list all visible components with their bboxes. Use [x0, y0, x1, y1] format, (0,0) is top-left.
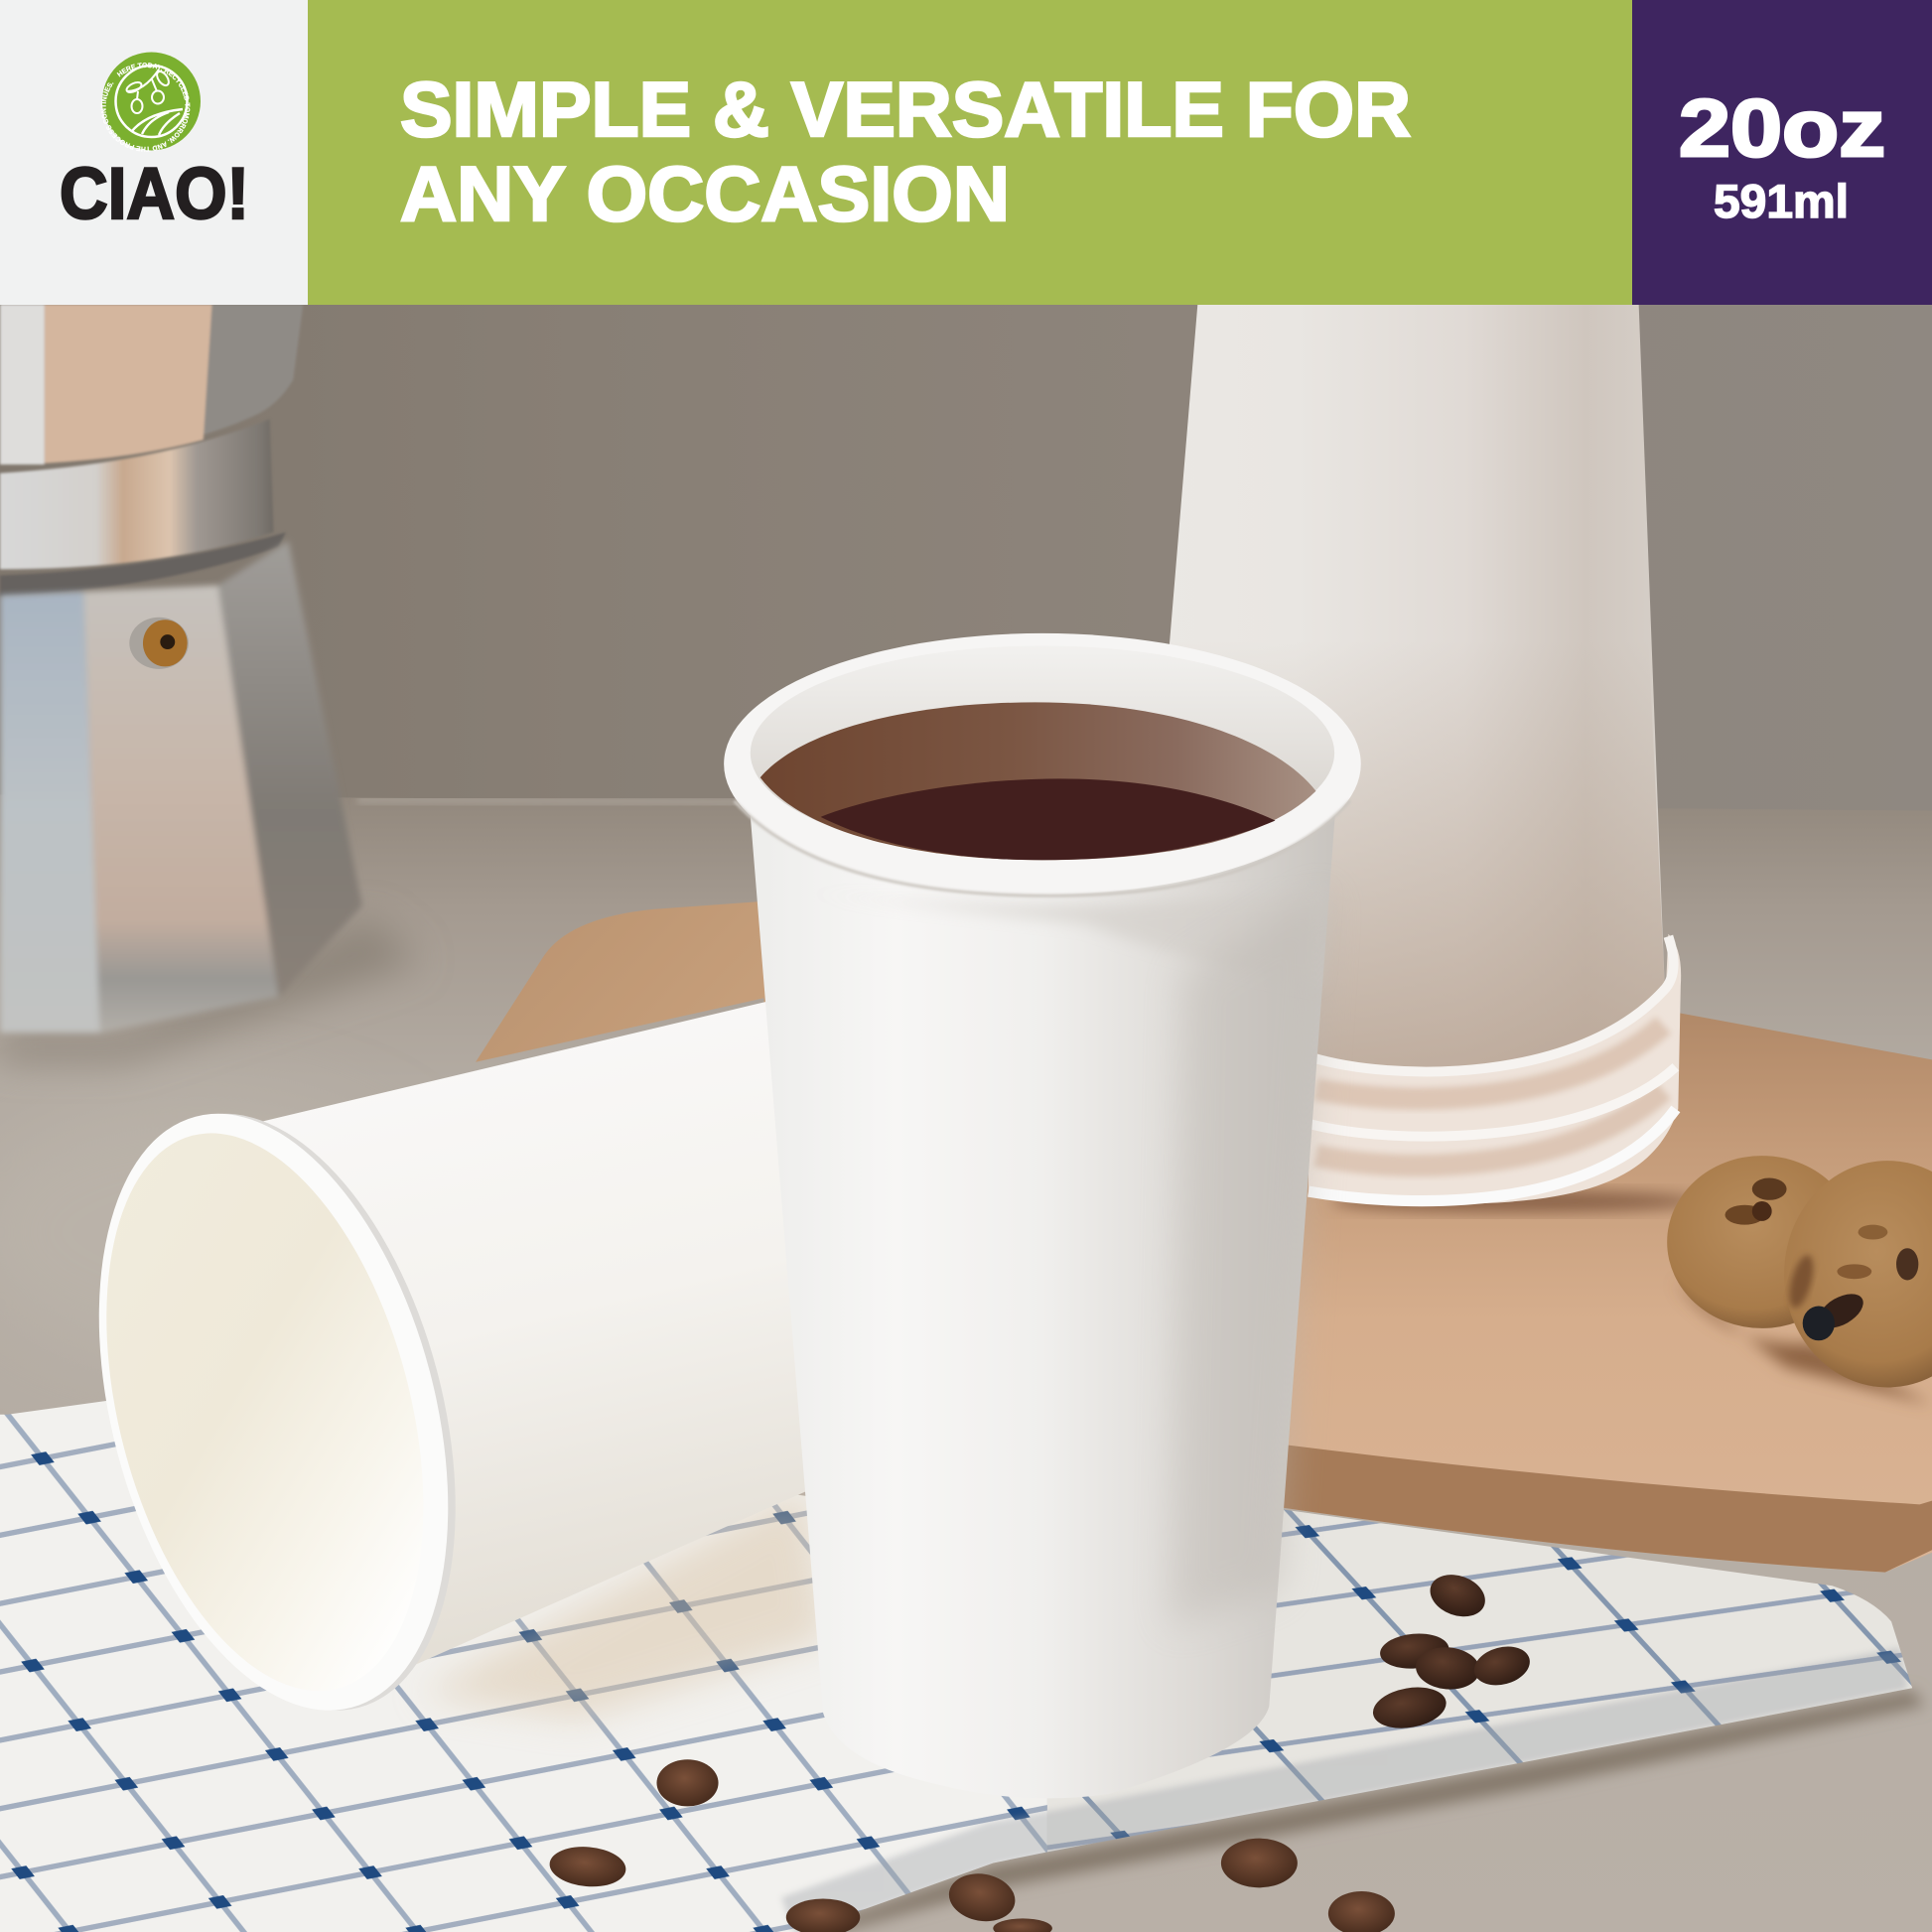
moka pot collar [0, 419, 274, 569]
stack rims [1309, 934, 1681, 1204]
title text [400, 66, 1411, 237]
stack body [1136, 305, 1665, 1071]
cloth left section [0, 1399, 1047, 1932]
lying cup rim shade [47, 1075, 515, 1748]
moka pot lower body [0, 541, 362, 1033]
moka pot safety valve [129, 618, 189, 669]
lying cup body [252, 1001, 807, 1666]
size in ounces: 20oz [1679, 83, 1885, 174]
seal olive sprig and leaves [125, 69, 183, 135]
moka pot [0, 305, 419, 1059]
title text: SIMPLE & VERSATILE FOR [400, 66, 1411, 153]
lying cup mouth [40, 1075, 507, 1748]
lying cup [99, 1002, 818, 1729]
coffee beans [548, 1568, 1534, 1932]
coffee dark reflection [821, 778, 1276, 860]
moka pot shadow [0, 918, 419, 1059]
board front edge [1269, 1443, 1932, 1573]
seal ring text: HERE TODAY, RECYCLED TOMORROW. AND THE PROCESS CONTINUES. [101, 63, 191, 151]
woven hem shading [788, 1668, 1903, 1917]
wall background [0, 305, 1932, 822]
table surface [0, 794, 1932, 1003]
wooden board [476, 899, 1932, 1573]
warm reflection under lying cup [419, 1484, 828, 1719]
cloth shadow on table [801, 1691, 1925, 1932]
coffee surface [760, 702, 1315, 860]
checked cloth [0, 1399, 1912, 1932]
icon: round recycling seal [101, 52, 201, 151]
header: size panel [1632, 0, 1932, 305]
front cup rim [724, 633, 1361, 895]
front cup inner wall [751, 645, 1334, 860]
front cup body [750, 801, 1335, 1798]
moka pot upper section [0, 305, 303, 465]
cookies [1667, 1156, 1932, 1405]
header: logo panel [0, 0, 308, 305]
size in millilitres: 591ml [1714, 175, 1849, 227]
cookie shadow [1676, 1282, 1932, 1405]
header: title panel [308, 0, 1632, 305]
brand wordmark: CIAO! [60, 154, 249, 234]
cloth right section [1047, 1509, 1912, 1852]
front cup [724, 633, 1361, 1798]
stack shadow on board [1330, 1190, 1701, 1212]
title text: ANY OCCASION [400, 150, 1010, 237]
stacked upside-down cups [1136, 305, 1701, 1212]
